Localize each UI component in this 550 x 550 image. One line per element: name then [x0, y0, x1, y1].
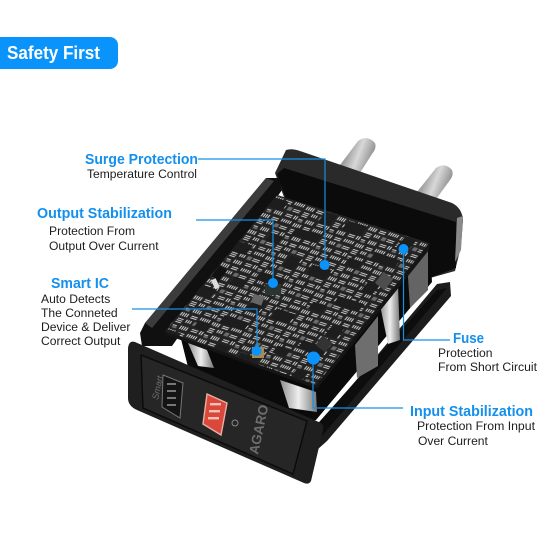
product: charger illustration: [128, 138, 463, 484]
callout: Input Stabilization: Protection From Input: [417, 419, 536, 433]
callout: Output Stabilization: Output Stabilization: [37, 206, 172, 222]
logo: AGARO: AGARO: [246, 403, 271, 456]
callout: Smart IC: Auto Detects: [41, 292, 110, 306]
callout: Output Stabilization: Protection From: [49, 224, 135, 238]
internal body: [180, 245, 432, 425]
logo: quick charge: [232, 420, 238, 426]
callout: Output Stabilization: Output Over Current: [49, 239, 159, 253]
housing left shell: [140, 178, 282, 346]
internal components: [188, 250, 428, 412]
logo: Smart: Smart: [150, 374, 165, 400]
housing right shell: [306, 282, 451, 449]
callout: Surge Protection: Surge Protection: [85, 152, 198, 168]
callout: Output Stabilization: [37, 206, 278, 288]
callout: Input Stabilization: [307, 352, 536, 448]
callout: Smart IC: Correct Output: [41, 334, 121, 348]
callout: Fuse: Fuse: [453, 331, 484, 347]
callout: Smart IC: [41, 276, 262, 356]
USB port: quick charge: [203, 394, 227, 435]
callout: Fuse: [398, 244, 538, 374]
callout: Input Stabilization: Over Current: [418, 434, 489, 448]
circuit board: [164, 195, 430, 389]
plug prongs: [340, 138, 453, 202]
USB port: Smart: [162, 375, 183, 418]
callout: Input Stabilization: Input Stabilization: [410, 404, 533, 420]
callout: Surge Protection: Temperature Control: [87, 167, 197, 181]
callout: Surge Protection: [85, 152, 330, 270]
front plate: [128, 342, 323, 484]
callout: Smart IC: Smart IC: [51, 276, 110, 292]
callout: Smart IC: Device & Deliver: [41, 320, 130, 334]
callout: Smart IC: The Conneted: [41, 306, 118, 320]
callout: Fuse: Protection: [438, 346, 492, 360]
plug cap: [275, 149, 463, 278]
badge: Safety First: [0, 37, 118, 69]
callout: Fuse: From Short Circuit: [438, 360, 538, 374]
badge: Safety First: Safety First: [7, 43, 100, 63]
